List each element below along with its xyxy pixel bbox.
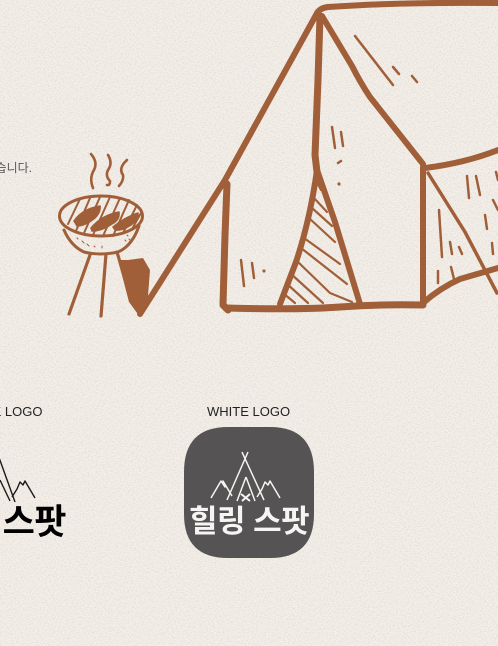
steam — [91, 154, 127, 188]
grill legs — [69, 252, 124, 316]
illustration: barbecue grill — [60, 154, 152, 317]
logo card: white logo background — [184, 427, 314, 558]
white logo mark — [211, 452, 280, 501]
tent sketch marks — [241, 36, 498, 286]
grill grate — [68, 197, 141, 236]
tent right roof line — [322, 16, 423, 164]
grilled meat — [74, 206, 138, 231]
grill bowl — [64, 226, 139, 254]
white logo wordmark: 힐링 스팟 — [189, 504, 309, 539]
tent side diagonal — [428, 173, 497, 293]
tent door hatching — [283, 182, 352, 303]
grill shadow — [118, 258, 152, 317]
tent door frame — [280, 170, 360, 304]
illustration: tent — [140, 3, 498, 314]
tent centre pole — [315, 16, 320, 172]
tent outer roof line — [140, 3, 498, 314]
heading: white logo: WHITE LOGO — [207, 404, 290, 419]
tent ground line — [226, 305, 423, 309]
black logo mark — [0, 452, 35, 502]
tent left wall — [223, 184, 228, 310]
tent side panel edges — [423, 150, 498, 305]
grill rim — [60, 196, 142, 236]
bowl speckles — [77, 235, 130, 248]
